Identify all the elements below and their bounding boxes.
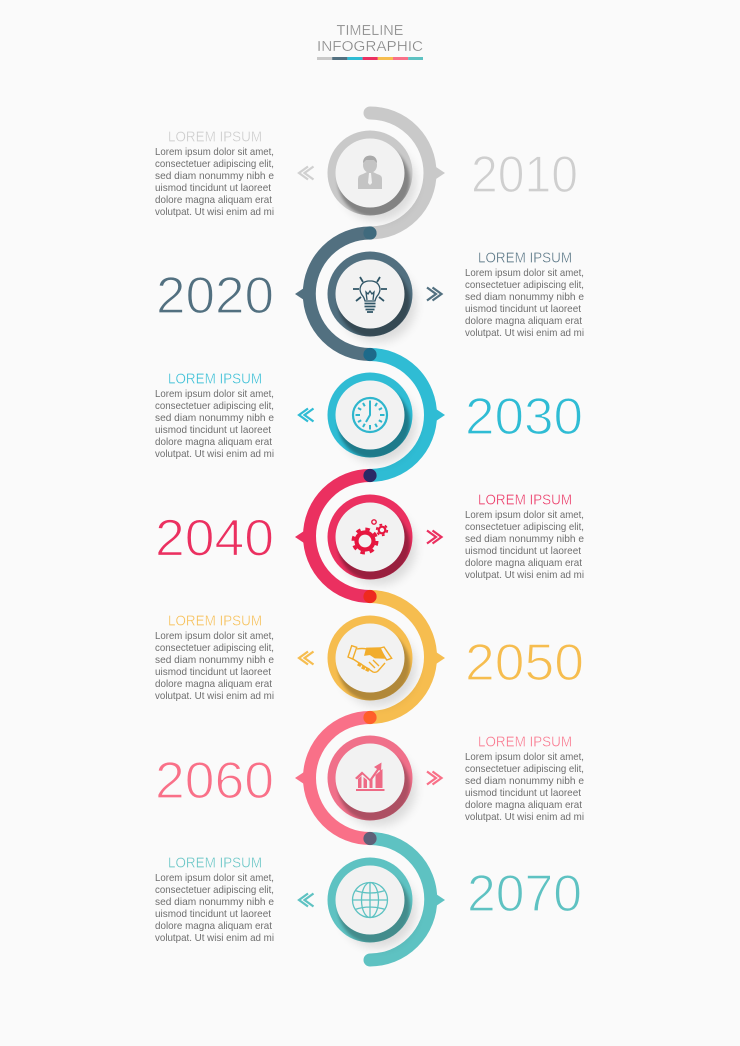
text block 2020: LOREM IPSUM	[478, 250, 572, 266]
title: TIMELINE	[336, 22, 404, 39]
step 2050	[155, 612, 584, 706]
text block 2040: Lorem ipsum dolor sit amet,	[465, 509, 584, 521]
text block 2010: uismod tincidunt ut laoreet	[155, 182, 271, 194]
text block 2050: dolore magna aliquam erat	[155, 678, 272, 690]
text block 2020: volutpat. Ut wisi enim ad mi	[465, 327, 584, 339]
text block 2030: dolore magna aliquam erat	[155, 436, 272, 448]
icon: clock	[353, 398, 387, 432]
text block 2010: consectetuer adipiscing elit,	[155, 158, 274, 170]
step 2010	[155, 128, 578, 221]
serpentine timeline path	[295, 113, 445, 960]
text block 2060: sed diam nonummy nibh e	[465, 775, 584, 787]
title: INFOGRAPHIC	[317, 38, 423, 55]
text block 2010	[155, 128, 274, 218]
text block 2020: consectetuer adipiscing elit,	[465, 279, 584, 291]
chevrons	[299, 408, 314, 422]
text block 2060: volutpat. Ut wisi enim ad mi	[465, 811, 584, 823]
text block 2070: sed diam nonummy nibh e	[155, 896, 274, 908]
text block 2050: Lorem ipsum dolor sit amet,	[155, 630, 274, 642]
text block 2070: Lorem ipsum dolor sit amet,	[155, 872, 274, 884]
badge	[328, 494, 416, 585]
year 2030: 2030	[465, 388, 583, 446]
icon: handshake	[348, 646, 392, 672]
text block 2030: consectetuer adipiscing elit,	[155, 400, 274, 412]
text block 2070: consectetuer adipiscing elit,	[155, 884, 274, 896]
text block 2060: Lorem ipsum dolor sit amet,	[465, 751, 584, 763]
text block 2050: LOREM IPSUM	[168, 612, 262, 630]
year 2040: 2040	[155, 510, 274, 568]
step 2060	[155, 734, 584, 826]
chevrons	[299, 894, 314, 906]
text block 2050: sed diam nonummy nibh e	[155, 654, 274, 666]
icon: growth chart	[355, 762, 384, 791]
text block 2040: consectetuer adipiscing elit,	[465, 521, 584, 533]
text block 2070: volutpat. Ut wisi enim ad mi	[155, 932, 274, 944]
text block 2040: sed diam nonummy nibh e	[465, 533, 584, 545]
year 2010: 2010	[471, 146, 578, 204]
text block 2070	[155, 854, 274, 944]
text block 2050: consectetuer adipiscing elit,	[155, 642, 274, 654]
step 2070	[155, 854, 582, 948]
text block 2060: dolore magna aliquam erat	[465, 799, 582, 811]
badge	[328, 130, 416, 221]
text block 2060: LOREM IPSUM	[478, 734, 572, 750]
text block 2070: LOREM IPSUM	[168, 854, 262, 872]
text block 2040: LOREM IPSUM	[478, 492, 572, 508]
text block 2010: volutpat. Ut wisi enim ad mi	[155, 206, 274, 218]
icon: light bulb	[353, 277, 387, 312]
text block 2050: uismod tincidunt ut laoreet	[155, 666, 271, 678]
text block 2070: dolore magna aliquam erat	[155, 920, 272, 932]
text block 2030: volutpat. Ut wisi enim ad mi	[155, 448, 274, 460]
text block 2030	[155, 370, 274, 460]
badge	[328, 736, 416, 826]
icon: globe	[352, 882, 388, 918]
text block 2010: sed diam nonummy nibh e	[155, 170, 274, 182]
text block 2010: LOREM IPSUM	[168, 128, 262, 146]
year 2060: 2060	[155, 752, 274, 810]
step 2040	[155, 492, 584, 585]
year 2020: 2020	[156, 267, 274, 325]
chevrons	[299, 166, 314, 180]
step 2020	[156, 250, 584, 342]
text block 2070: uismod tincidunt ut laoreet	[155, 908, 271, 920]
text block 2030: Lorem ipsum dolor sit amet,	[155, 388, 274, 400]
text block 2010: Lorem ipsum dolor sit amet,	[155, 146, 274, 158]
text block 2060	[465, 734, 584, 823]
chevrons	[427, 288, 442, 300]
text block 2030: uismod tincidunt ut laoreet	[155, 424, 271, 436]
text block 2020: dolore magna aliquam erat	[465, 315, 582, 327]
text block 2020: uismod tincidunt ut laoreet	[465, 303, 581, 315]
text block 2030: sed diam nonummy nibh e	[155, 412, 274, 424]
text block 2010: dolore magna aliquam erat	[155, 194, 272, 206]
badge	[328, 252, 416, 342]
text block 2040	[465, 492, 584, 581]
step 2030	[155, 370, 583, 463]
badge	[328, 858, 416, 948]
text block 2050	[155, 612, 274, 702]
text block 2040: uismod tincidunt ut laoreet	[465, 545, 581, 557]
text block 2030: LOREM IPSUM	[168, 370, 262, 388]
chevrons	[427, 530, 442, 544]
text block 2040: volutpat. Ut wisi enim ad mi	[465, 569, 584, 581]
title	[317, 22, 423, 60]
icon: gears	[353, 520, 387, 553]
chevrons	[299, 652, 314, 664]
text block 2060: consectetuer adipiscing elit,	[465, 763, 584, 775]
icon: businessman	[358, 156, 382, 189]
badge	[328, 616, 416, 706]
year 2050: 2050	[465, 634, 584, 692]
text block 2060: uismod tincidunt ut laoreet	[465, 787, 581, 799]
text block 2020: Lorem ipsum dolor sit amet,	[465, 267, 584, 279]
text block 2040: dolore magna aliquam erat	[465, 557, 582, 569]
text block 2050: volutpat. Ut wisi enim ad mi	[155, 690, 274, 702]
year 2070: 2070	[467, 865, 582, 923]
text block 2020: sed diam nonummy nibh e	[465, 291, 584, 303]
badge	[328, 372, 416, 463]
chevrons	[427, 772, 442, 784]
text block 2020	[465, 250, 584, 339]
